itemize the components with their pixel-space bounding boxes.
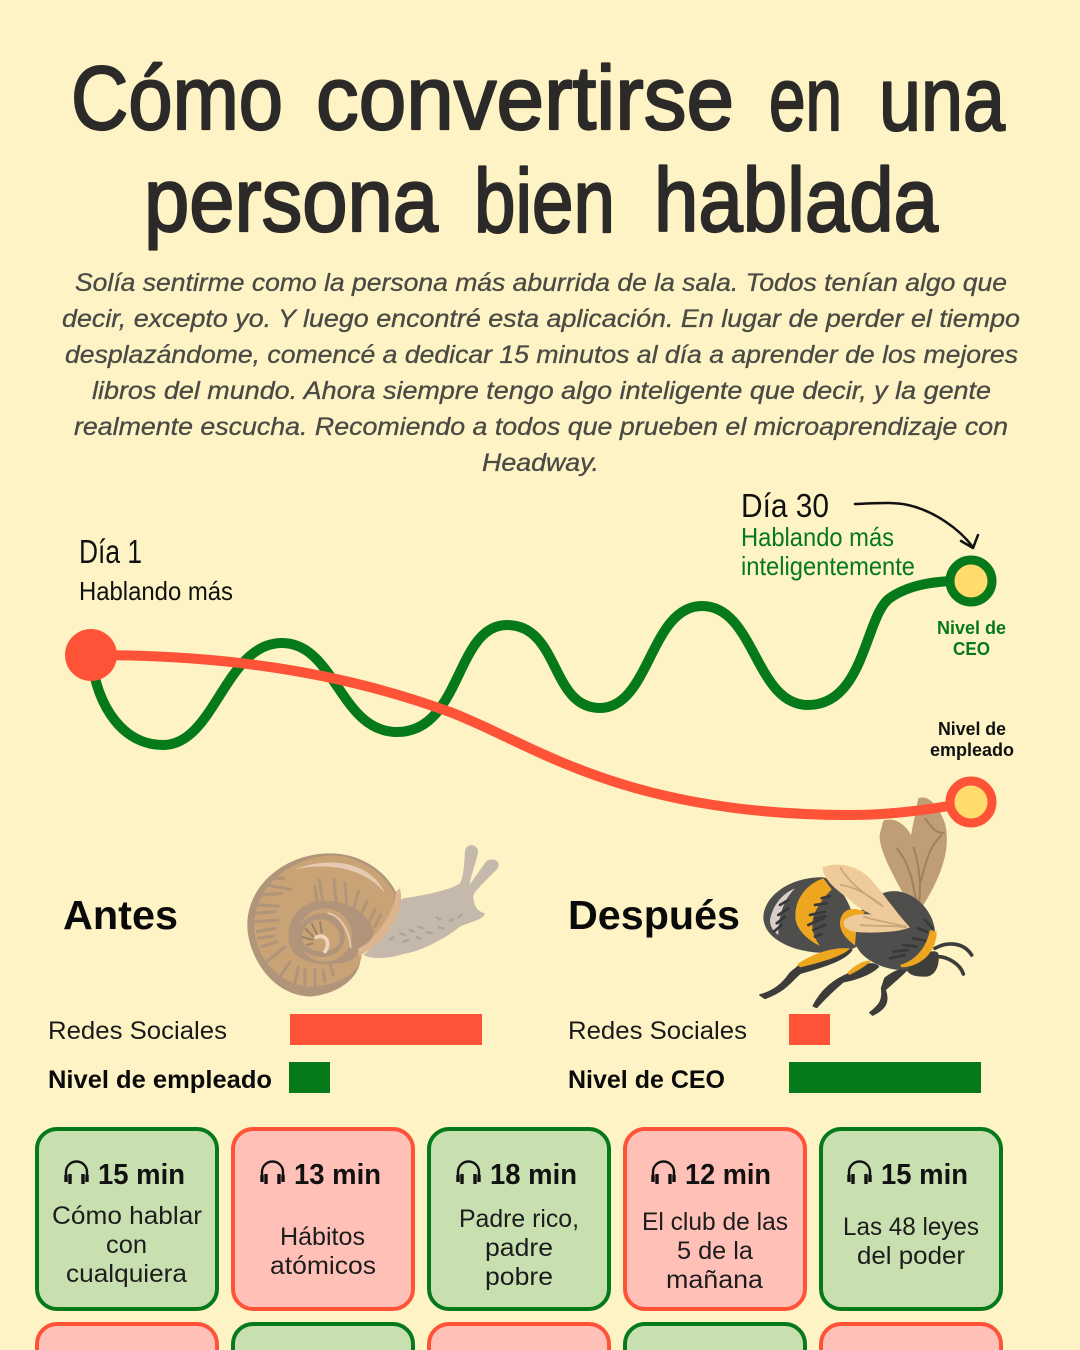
heading: Antes xyxy=(63,892,178,938)
card: 12 min El club de las 5 de la mañana: El club de las xyxy=(642,1208,788,1236)
card: 18 min Padre rico, padre pobre: pobre xyxy=(485,1263,553,1291)
card: 12 min El club de las 5 de la mañana xyxy=(625,1129,805,1309)
label: día 30: Día 30 xyxy=(741,487,829,524)
label: día 30: inteligentemente xyxy=(741,551,915,581)
title: bien xyxy=(474,152,615,252)
card: 15 min Las 48 leyes del poder: del poder xyxy=(857,1242,965,1270)
card: 15 min Cómo hablar con cualquiera: cualquiera xyxy=(66,1260,187,1288)
intro paragraph: desplazándome, comencé a dedicar 15 minutos al día a aprender de los mejores xyxy=(65,341,1018,369)
body xyxy=(363,845,499,958)
card: 15 min Cómo hablar con cualquiera: 15 min xyxy=(98,1159,185,1191)
icon: snail xyxy=(247,845,499,997)
title xyxy=(71,49,1006,252)
card: 18 min Padre rico, padre pobre: Padre rico, xyxy=(459,1205,579,1233)
label: employee level: empleado xyxy=(930,740,1014,760)
abdomen xyxy=(763,877,857,953)
panel: después xyxy=(568,892,981,1094)
heading: Después xyxy=(568,892,740,938)
card: 18 min Padre rico, padre pobre: padre xyxy=(485,1234,553,1262)
start point xyxy=(65,629,117,681)
bar: social media high xyxy=(290,1014,482,1045)
title: Cómo xyxy=(71,49,283,149)
bar: level high xyxy=(789,1062,981,1093)
highlight xyxy=(295,863,385,893)
card: 13 min Hábitos atómicos: 13 min xyxy=(294,1159,381,1191)
row: social media: Redes Sociales xyxy=(48,1017,227,1045)
title: en xyxy=(769,50,842,150)
title: convertirse xyxy=(316,49,734,149)
orange leg bands xyxy=(797,948,872,975)
icon: headphones xyxy=(849,1162,870,1184)
ribs xyxy=(255,878,381,987)
end point: employee xyxy=(950,781,992,823)
card: 13 min Hábitos atómicos: atómicos xyxy=(270,1252,376,1280)
intro paragraph: Headway. xyxy=(482,449,599,477)
bar: level low xyxy=(289,1062,330,1093)
card: 12 min El club de las 5 de la mañana: 12 min xyxy=(685,1159,771,1191)
label: día 30: Hablando más xyxy=(741,522,894,552)
intro paragraph: libros del mundo. Ahora siempre tengo algo inteligente que decir, y la gente xyxy=(92,377,991,405)
arrow to CEO level xyxy=(855,503,978,548)
icon: headphones xyxy=(262,1162,283,1184)
row: employee level: Nivel de empleado xyxy=(48,1066,272,1094)
label: día 1: Hablando más xyxy=(79,576,233,606)
legs xyxy=(760,950,907,1015)
row: social media: Redes Sociales xyxy=(568,1017,747,1045)
intro paragraph xyxy=(62,269,1020,477)
icon: bee xyxy=(760,798,972,1015)
mantle xyxy=(358,888,401,956)
spiral band xyxy=(288,901,373,964)
card: 15 min Las 48 leyes del poder: Las 48 leyes xyxy=(843,1213,979,1241)
green curve xyxy=(91,580,971,745)
card: 15 min Cómo hablar con cualquiera: con xyxy=(106,1231,147,1259)
front wings xyxy=(823,865,910,927)
fur strokes xyxy=(774,896,933,958)
title: una xyxy=(879,50,1006,150)
label: CEO level: Nivel de xyxy=(937,618,1006,638)
antennae xyxy=(935,944,972,974)
row: CEO level: Nivel de CEO xyxy=(568,1066,725,1094)
inner whorl xyxy=(297,913,345,957)
intro paragraph: realmente escucha. Recomiendo a todos que prueben el microaprendizaje con xyxy=(74,413,1008,441)
label: día 30 xyxy=(741,487,915,581)
card: 15 min Cómo hablar con cualquiera xyxy=(37,1129,217,1309)
head xyxy=(907,951,939,977)
thorax xyxy=(853,891,935,970)
card row 2: partial cards cut off at the page edge xyxy=(37,1324,1001,1350)
card: 18 min Padre rico, padre pobre xyxy=(429,1129,609,1309)
card: 13 min Hábitos atómicos: Hábitos xyxy=(280,1223,365,1251)
title: persona xyxy=(144,151,439,251)
icon: headphones xyxy=(458,1162,479,1184)
card: 13 min Hábitos atómicos xyxy=(233,1129,413,1309)
bar: social media low xyxy=(789,1014,830,1045)
red curve xyxy=(91,655,971,815)
card: 12 min El club de las 5 de la mañana: 5 de la xyxy=(677,1237,753,1265)
back wings xyxy=(880,798,947,911)
intro paragraph: decir, excepto yo. Y luego encontré esta aplicación. En lugar de perder el tiempo xyxy=(62,305,1020,333)
line chart: green and red curves xyxy=(65,560,992,823)
end point: CEO xyxy=(950,560,992,602)
icon: headphones xyxy=(66,1162,87,1184)
shell outer xyxy=(247,853,396,997)
card: 12 min El club de las 5 de la mañana: mañana xyxy=(666,1266,763,1294)
card: 15 min Las 48 leyes del poder xyxy=(821,1129,1001,1309)
icon: headphones xyxy=(653,1162,674,1184)
label: día 1: Día 1 xyxy=(79,533,142,570)
shell tan xyxy=(254,855,394,987)
label: employee level: Nivel de xyxy=(938,719,1006,739)
card: 15 min Las 48 leyes del poder: 15 min xyxy=(881,1159,968,1191)
panel: antes xyxy=(48,892,482,1094)
card: 15 min Cómo hablar con cualquiera: Cómo hablar xyxy=(52,1202,202,1230)
card: 18 min Padre rico, padre pobre: 18 min xyxy=(490,1159,577,1191)
label: employee level xyxy=(930,719,1014,760)
label: CEO level xyxy=(937,618,1006,659)
label: CEO level: CEO xyxy=(953,639,990,659)
intro paragraph: Solía sentirme como la persona más aburrida de la sala. Todos tenían algo que xyxy=(75,269,1007,297)
title: hablada xyxy=(654,151,939,251)
label: día 1 xyxy=(79,533,233,606)
